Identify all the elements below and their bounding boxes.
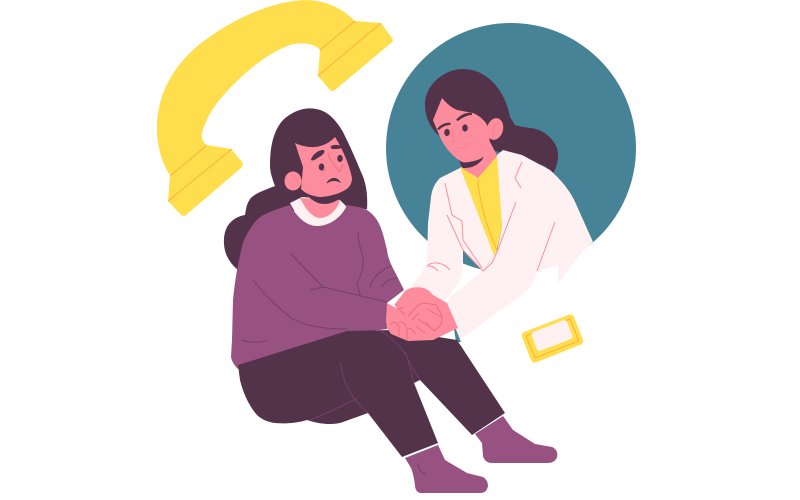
sweater fold lines: [242, 232, 397, 342]
patient chin shadow: [302, 189, 345, 204]
patient: [224, 108, 557, 493]
doctor: [407, 69, 593, 340]
rear sock: [475, 416, 557, 463]
patient face: [295, 137, 352, 197]
doctor neck and chin shadow: [460, 142, 498, 178]
teal sliver by the knee: [453, 322, 461, 342]
trouser fold lines: [310, 330, 420, 420]
icon: yellow telephone handset: [157, 0, 393, 216]
coat fold lines: [427, 162, 555, 271]
patient trousers: [238, 330, 505, 457]
doctor face: [433, 98, 490, 162]
white coat: right panel and arm: [445, 150, 593, 340]
clasped hands: [386, 287, 458, 341]
teal circle behind doctor: [386, 23, 636, 273]
doctor eyes and brows: [437, 113, 472, 136]
patient ear: [284, 172, 302, 190]
yellow shirt: [460, 155, 502, 258]
doctor ear: [484, 116, 506, 142]
patient hair: [224, 108, 367, 270]
white coat: left panel and arm: [407, 167, 497, 310]
front sock: [405, 445, 488, 493]
patient eyes and brows: [311, 145, 343, 171]
icon: yellow mobile phone on floor: [522, 314, 583, 363]
doctor hair: [425, 69, 558, 173]
patient sweater: [231, 205, 404, 369]
patient collar and neck: [290, 197, 347, 226]
patient nose and mouth: [322, 153, 343, 172]
doctor nose and mouth: [452, 129, 470, 148]
